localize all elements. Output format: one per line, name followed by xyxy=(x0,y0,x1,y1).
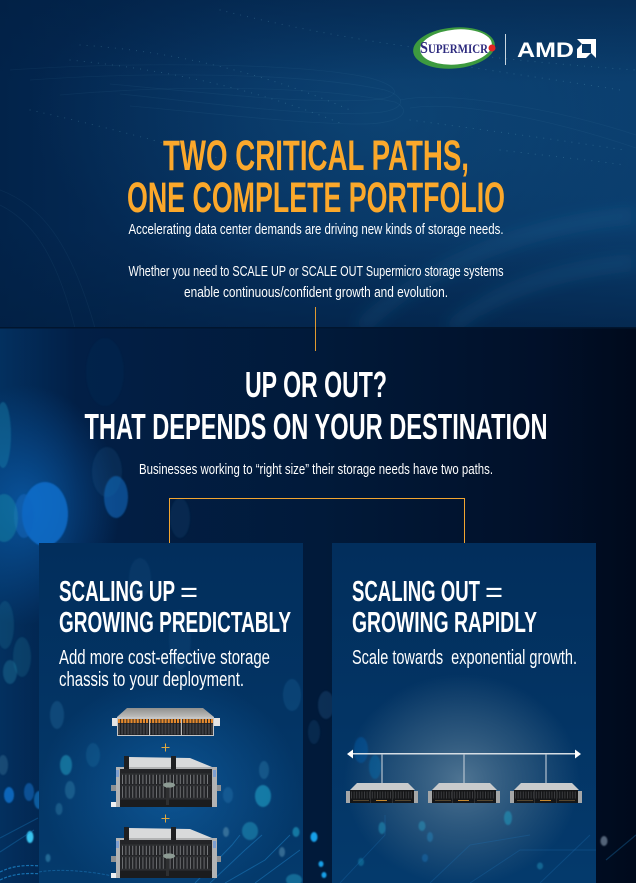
panel bokeh xyxy=(46,558,302,883)
logo: Supermicro: SUPERMICR xyxy=(420,38,489,57)
connector line xyxy=(315,307,316,351)
heading: SCALING UP xyxy=(59,576,175,608)
description xyxy=(59,647,270,691)
storage server 4U xyxy=(111,827,221,878)
server node 3 xyxy=(510,783,582,803)
server node 2 xyxy=(428,783,500,803)
hero background xyxy=(0,0,636,328)
heading: GROWING RAPIDLY xyxy=(352,607,537,639)
bokeh lights behind heading xyxy=(0,338,608,878)
logo: Supermicro xyxy=(411,24,497,72)
title: TWO CRITICAL PATHS, xyxy=(163,132,469,180)
panel circuit traces xyxy=(340,815,596,883)
title xyxy=(127,132,505,222)
panel: scaling out xyxy=(332,543,596,883)
section subtitle: Businesses working to “right size” their storage needs have two paths. xyxy=(139,462,493,478)
hero base edge xyxy=(0,327,636,328)
storage server 4U xyxy=(111,756,221,807)
logo: AMD xyxy=(517,39,596,62)
logos xyxy=(411,24,596,72)
lower section background xyxy=(0,328,636,883)
intro text: Whether you need to SCALE UP or SCALE OUT Supermicro storage systems xyxy=(128,264,504,280)
connector stems xyxy=(382,754,546,783)
description: chassis to your deployment. xyxy=(59,669,244,691)
section heading xyxy=(84,364,548,447)
heading: SCALING OUT xyxy=(352,576,480,608)
panel circuit traces xyxy=(39,835,300,883)
panel bokeh xyxy=(354,737,543,870)
heading: GROWING PREDICTABLY xyxy=(59,607,291,639)
heading xyxy=(59,576,291,639)
intro text: Accelerating data center demands are driving new kinds of storage needs. xyxy=(128,222,504,238)
heading xyxy=(352,576,537,639)
logo: AMD: AMD xyxy=(517,39,574,62)
heading: = xyxy=(180,577,198,609)
centre glow xyxy=(344,674,580,883)
storage server 2U xyxy=(112,708,220,736)
double arrow xyxy=(347,750,581,758)
server node 1 xyxy=(346,783,418,803)
logo divider xyxy=(505,34,506,65)
heading: = xyxy=(485,577,503,609)
intro text xyxy=(128,222,504,301)
plus xyxy=(162,744,170,752)
panel: scaling up xyxy=(39,543,303,883)
panel glow xyxy=(40,675,300,883)
description: Add more cost-effective storage xyxy=(59,647,270,669)
section heading: UP OR OUT? xyxy=(245,364,387,405)
intro text: enable continuous/confident growth and evolution. xyxy=(184,285,448,301)
circuit traces outer xyxy=(0,818,636,883)
plus xyxy=(162,814,170,822)
branch connector xyxy=(170,498,464,544)
